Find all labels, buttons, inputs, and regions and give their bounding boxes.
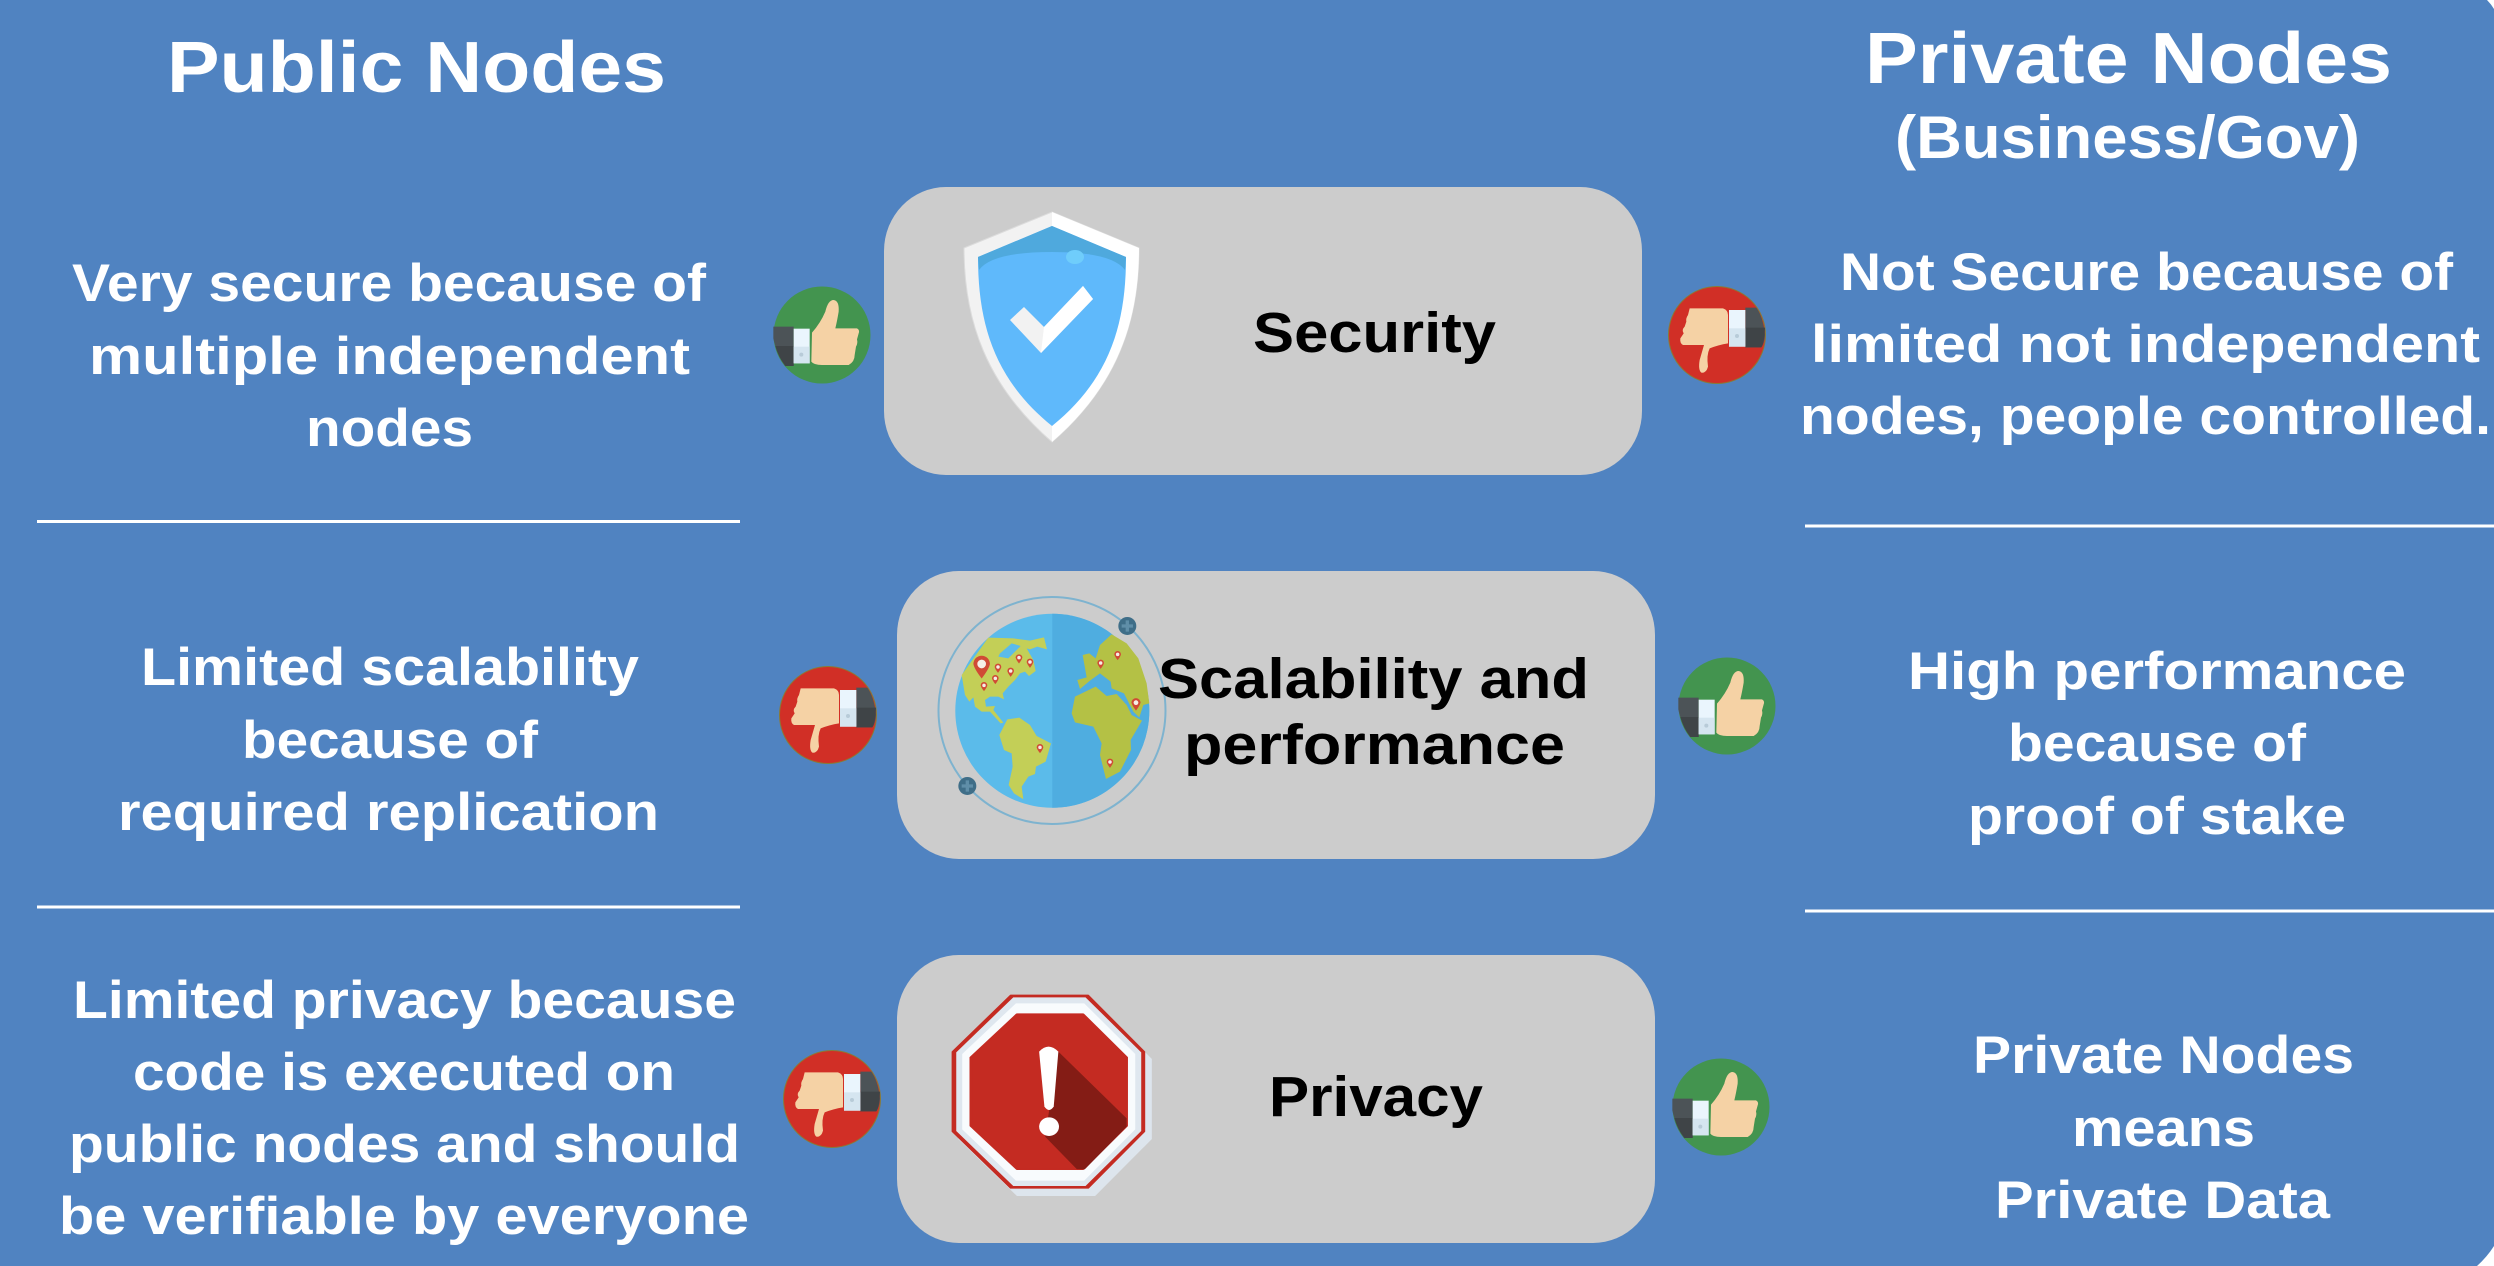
text: private privacy [1973, 1026, 2354, 1230]
text: private security: nodes, people controlled. [1800, 387, 2491, 446]
text: private scalability [1908, 642, 2406, 846]
text: public scalability: because of [242, 711, 538, 770]
icon: thumbs up public security [773, 286, 870, 384]
heading: Private Nodes (Business/Gov): (Business/Gov) [1895, 104, 2360, 171]
text: private privacy: Private Data [1995, 1171, 2331, 1230]
panel: security [884, 187, 1642, 475]
panel: privacy [897, 955, 1655, 1243]
text: public scalability: required replication [118, 783, 659, 842]
text: public privacy: be verifiable by everyone [59, 1187, 749, 1246]
label: Security: Security [1253, 301, 1496, 365]
icon: thumbs down private security [1668, 286, 1766, 384]
heading: Public Nodes: Public Nodes [167, 28, 666, 108]
icon: globe [938, 597, 1166, 824]
text: private privacy: Private Nodes [1973, 1026, 2354, 1085]
label: Scalability and performance: performance [1184, 713, 1565, 777]
text: public scalability: Limited scalability [141, 638, 640, 697]
text: private scalability: because of [2008, 714, 2306, 773]
text: private security [1800, 243, 2491, 446]
icon: thumbs up private privacy [1672, 1058, 1770, 1156]
text: public security: nodes [306, 399, 473, 458]
icon: thumbs down public privacy [784, 1050, 880, 1148]
text: public privacy: code is executed on [133, 1043, 675, 1102]
panel: scalability and performance [897, 571, 1655, 859]
text: public privacy: public nodes and should [69, 1115, 740, 1174]
icon: shield [964, 212, 1139, 442]
icon: thumbs up private scalability [1678, 658, 1776, 754]
heading: Private Nodes (Business/Gov): Private Nodes [1865, 19, 2392, 99]
text: public security [72, 254, 706, 458]
icon: thumbs down public scalability [780, 666, 876, 764]
text: private scalability: proof of stake [1968, 787, 2346, 846]
text: public security: multiple independent [89, 327, 690, 386]
text: private security: limited not independent [1811, 315, 2480, 374]
text: private privacy: means [2072, 1099, 2255, 1158]
heading: Private Nodes (Business/Gov) [1865, 19, 2392, 171]
text: private scalability: High performance [1908, 642, 2406, 701]
label: Scalability and performance: Scalability and [1158, 647, 1589, 711]
text: public scalability [118, 638, 659, 842]
text: public privacy [59, 971, 749, 1246]
text: public security: Very secure because of [72, 254, 706, 313]
text: private security: Not Secure because of [1840, 243, 2453, 302]
label: Privacy: Privacy [1269, 1065, 1483, 1129]
icon: stop sign [952, 995, 1151, 1196]
text: public privacy: Limited privacy because [73, 971, 736, 1030]
label: Scalability and performance [1158, 647, 1589, 777]
